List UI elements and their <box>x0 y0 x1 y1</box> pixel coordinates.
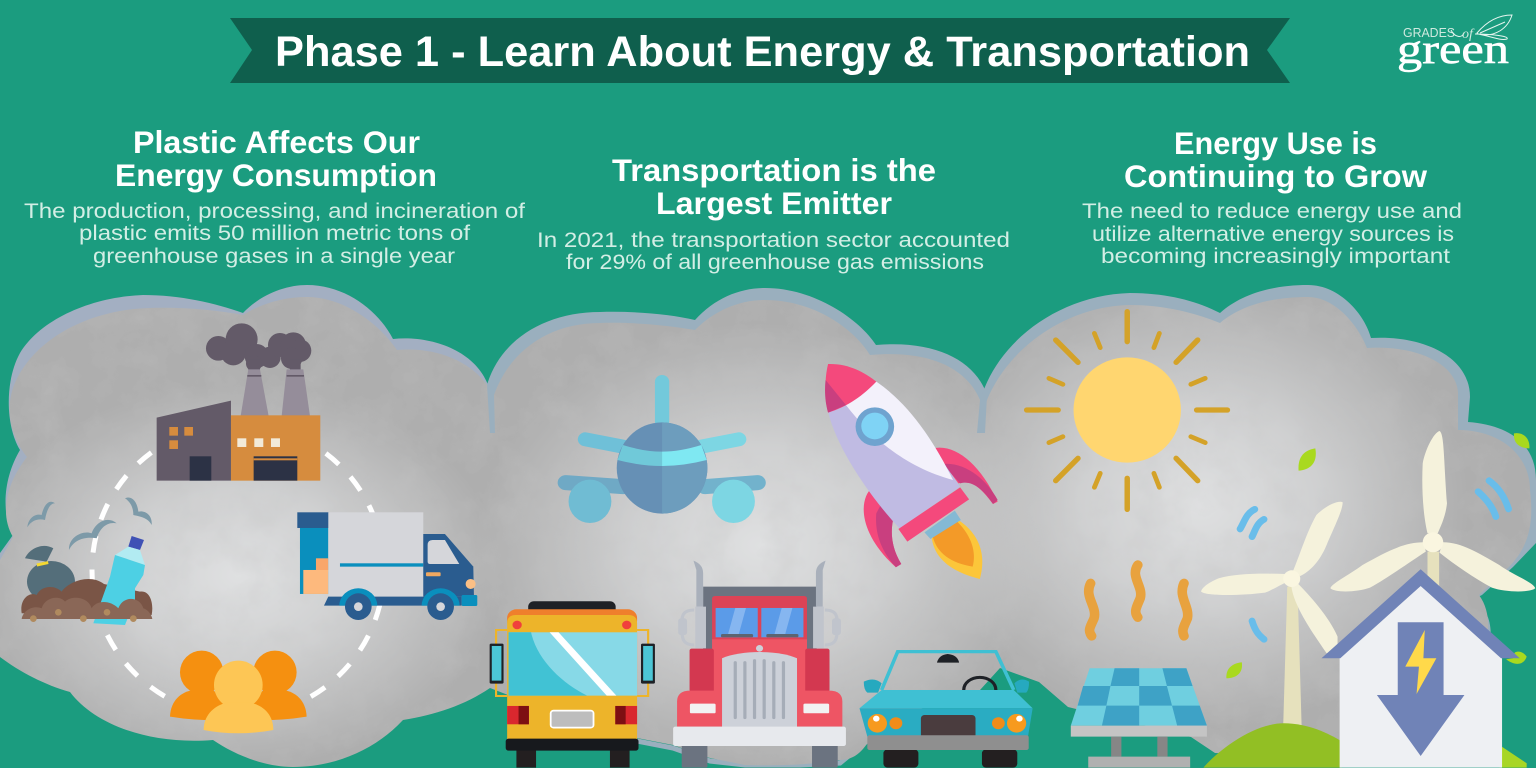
body text: transportation share: In 2021, the transportation sector accounted <box>537 228 1010 252</box>
icon: factory <box>157 323 320 481</box>
body text: plastic emissions: The production, processing, and incineration of <box>24 199 525 223</box>
panel: energy use <box>1027 125 1535 768</box>
heading: plastic affects our energy consumption <box>115 124 437 193</box>
icon: wind lines and leaves <box>1226 433 1529 678</box>
body text: energy use: becoming increasingly important <box>1101 244 1450 268</box>
heading: energy use is continuing to grow: Continuing to Grow <box>1124 158 1428 194</box>
heading: plastic affects our energy consumption: Energy Consumption <box>115 157 437 193</box>
panel: plastic and energy consumption <box>21 124 525 733</box>
title banner <box>230 18 1290 83</box>
icon: people <box>170 651 307 733</box>
logo: Grades of Green <box>1397 15 1512 73</box>
icon: rocket <box>825 364 998 579</box>
logo: Grades of Green: green <box>1397 27 1509 73</box>
icon: car <box>859 652 1033 768</box>
body text: transportation share <box>537 228 1010 274</box>
icon: green hills <box>1203 723 1527 768</box>
icon: wind turbines <box>1201 431 1535 727</box>
panel: transportation <box>490 152 1033 768</box>
body text: energy use <box>1082 199 1462 268</box>
body text: energy use: utilize alternative energy sources is <box>1092 222 1454 246</box>
heading: transportation is the largest emitter: Transportation is the <box>612 152 936 188</box>
icon: school bus <box>490 601 655 768</box>
logo: Grades of Green: GRADES <box>1403 26 1455 40</box>
logo: Grades of Green: of <box>1462 27 1475 42</box>
body text: plastic emissions <box>24 199 525 268</box>
icon: solar panel with heat waves <box>1071 565 1207 768</box>
icon: plastic waste pile <box>21 497 152 625</box>
icon: semi truck <box>673 561 846 768</box>
heading: plastic affects our energy consumption: Plastic Affects Our <box>133 124 420 160</box>
icon: airplane <box>566 375 758 523</box>
heading: energy use is continuing to grow <box>1124 125 1428 194</box>
heading: energy use is continuing to grow: Energy Use is <box>1174 125 1377 161</box>
body text: plastic emissions: greenhouse gases in a single year <box>93 244 455 268</box>
dashed lifecycle circle <box>92 424 384 716</box>
icon: house with energy arrow <box>1321 569 1520 768</box>
body text: plastic emissions: plastic emits 50 million metric tons of <box>79 221 470 245</box>
heading: transportation is the largest emitter <box>612 152 936 221</box>
icon: delivery truck <box>297 512 477 620</box>
smog clouds <box>0 280 1536 768</box>
body text: energy use: The need to reduce energy use and <box>1082 199 1462 223</box>
icon: sun <box>1027 312 1227 509</box>
body text: transportation share: for 29% of all greenhouse gas emissions <box>566 250 984 274</box>
heading: transportation is the largest emitter: Largest Emitter <box>656 185 892 221</box>
title banner: Phase 1 - Learn About Energy & Transportation <box>275 28 1250 76</box>
